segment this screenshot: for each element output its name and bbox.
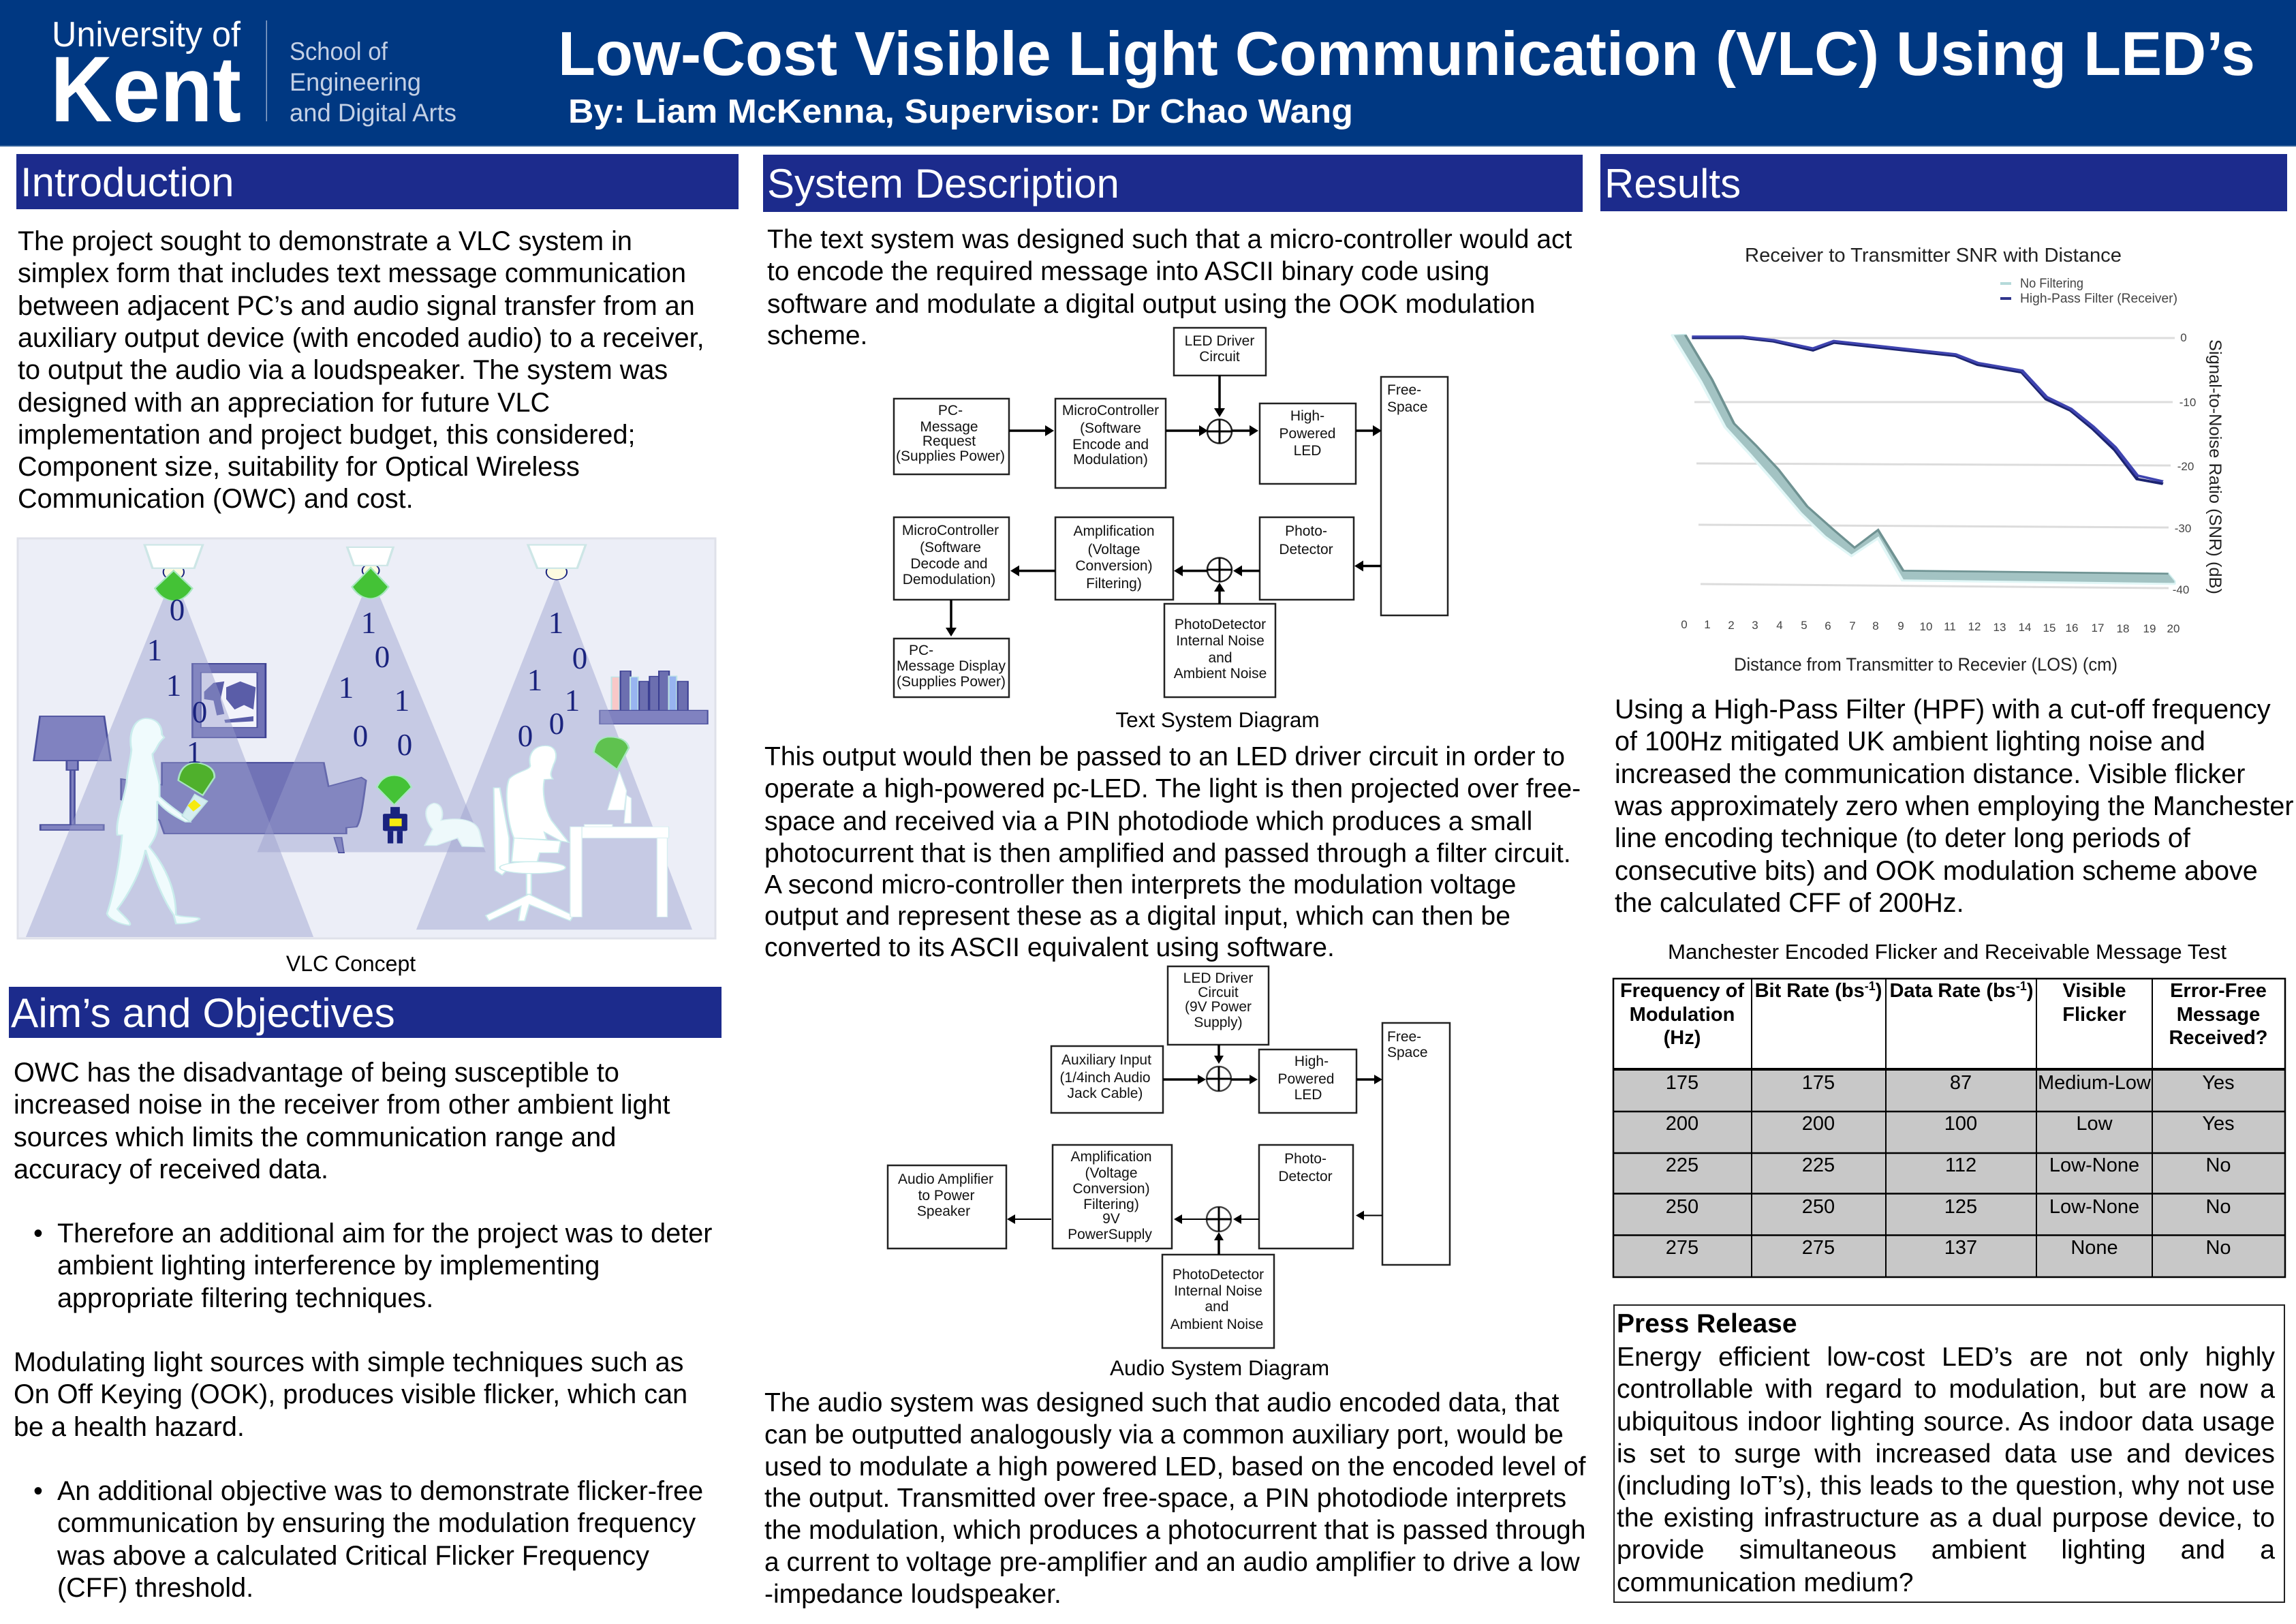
block: PC Message Request: PC- [938,403,963,418]
heading: Aim's and Objectives [9,987,722,1038]
block: High-Powered LED audio: Powered [1278,1071,1334,1087]
binary digits: 1 [548,606,563,640]
text: system description part 2: This output would then be passed to an LED driver circuit in order to [764,742,1565,771]
text: aims body: appropriate filtering techniques. [57,1283,433,1313]
binary digits: 0 [397,728,412,762]
x tick labels: 8 [1872,619,1879,632]
text: results body: increased the communication distance. Visible flicker [1615,759,2245,789]
x tick labels: 10 [1920,620,1932,633]
x tick labels: 2 [1728,619,1735,632]
binary digits: 0 [572,641,587,675]
table rows: Medium-Low [2038,1072,2152,1094]
binary digits: 1 [527,663,542,697]
text: aims body [14,1058,712,1603]
text: introduction body: Communication (OWC) and cost. [18,484,414,514]
x tick labels: 18 [2117,622,2129,635]
table rows: 87 [1950,1072,1972,1094]
block: PhotoDetector noise audio: Ambient Noise [1170,1317,1263,1332]
summing junctions [1207,1067,1231,1231]
binary digits: 0 [549,707,564,741]
text: results body: was approximately zero when employing the Manchester [1614,791,2294,821]
caption: VLC Concept: VLC Concept [286,951,416,976]
table header: -1 [1865,979,1876,993]
block: Amplification: (Voltage [1087,542,1141,557]
x tick labels: 0 [1681,618,1688,631]
text: introduction body: simplex form that includes text message communication [18,258,686,288]
bookshelf [600,671,708,724]
press release body: the existing infrastructure as a dual purpose device, to [1617,1503,2275,1533]
text: system description part 2 [764,742,1581,962]
block: Auxiliary Input: Auxiliary Input [1061,1052,1151,1068]
table rows: 175 [1666,1072,1698,1094]
text: introduction body: Component size, suitability for Optical Wireless [18,452,580,482]
block: PhotoDetector noise: Internal Noise [1176,633,1265,649]
block: Audio Amplifier: Audio Amplifier [898,1171,993,1187]
block: PC Message Request [894,399,1009,474]
binary digits: 1 [187,735,202,769]
heading: Results: Results [1604,161,1741,206]
logo: School of Engineering and Digital Arts: and Digital Arts [290,99,456,127]
heading: Introduction [16,154,739,209]
chart title: Receiver to Transmitter SNR with Distance [1745,245,2122,266]
x tick labels: 17 [2092,622,2104,634]
x tick labels: 15 [2043,622,2055,634]
text: aims body: be a health hazard. [14,1412,245,1442]
ceiling lights [144,545,586,580]
x tick labels: 14 [2019,621,2031,634]
block: MicroController decode: Decode and [910,556,988,572]
block: PhotoDetector noise audio [1162,1255,1274,1348]
block: Photo-Detector: Photo- [1285,523,1327,539]
text: introduction body: between adjacent PC’s and audio signal transfer from an [18,291,695,321]
block: MicroController encode: Encode and [1072,437,1149,453]
text: results body: of 100Hz mitigated UK ambient lighting noise and [1615,726,2205,756]
binary digits: 0 [375,640,390,674]
binary digits: 1 [147,633,162,667]
receive signal fans [179,737,629,805]
robot [383,807,407,844]
text: results body [1614,694,2294,918]
block: LED Driver Circuit: Circuit [1199,349,1240,365]
block: Photo-Detector [1260,517,1354,600]
text: system description part 1: scheme. [767,321,867,350]
table rows: 250 [1666,1196,1698,1218]
x axis title: Distance from Transmitter to Recevier (LOS) (cm) [1734,654,2117,675]
chart: SNR with distance [1672,245,2224,675]
table rows: 100 [1944,1113,1977,1135]
text: system description part 2: output and represent these as a digital input, which can then be [764,902,1510,931]
logo: University of Kent: Kent [50,37,241,142]
table rows: None [2070,1237,2118,1259]
text: aims body: OWC has the disadvantage of being susceptible to [14,1058,619,1088]
block: Auxiliary Input: Jack Cable) [1068,1086,1143,1101]
arrows [1007,1045,1382,1255]
binary digits: 0 [518,719,533,753]
text: system description part 1: software and modulate a digital output using the OOK modulation [767,290,1535,319]
block: Photo-Detector audio [1259,1145,1353,1248]
header banner [0,0,2296,147]
table rows: 200 [1802,1113,1835,1135]
block: Amplification audio: 9V [1102,1211,1120,1227]
series: no filtering [1672,334,2175,584]
block: PhotoDetector noise audio: Internal Noise [1174,1283,1262,1299]
logo: School of Engineering and Digital Arts: School of [290,37,388,65]
block: Auxiliary Input: (1/4inch Audio [1059,1070,1151,1086]
x tick labels: 12 [1968,620,1981,633]
y tick labels: -10 [2179,396,2196,409]
block: Photo-Detector: Detector [1279,542,1333,557]
text: system description part 3: the output. Transmitted over free-space, a PIN photodiode interprets [764,1484,1566,1513]
block: Amplification [1055,517,1173,600]
illustration: VLC concept [18,538,715,938]
press release body: provide simultaneous ambient lighting and a [1617,1535,2275,1565]
text: aims body: Therefore an additional aim for the project was to deter [57,1219,712,1248]
block: LED Driver Circuit: LED Driver [1185,333,1254,349]
block: Amplification audio: PowerSupply [1068,1227,1152,1242]
text: aims body: On Off Keying (OOK), produces visible flicker, which can [14,1379,687,1409]
block: PhotoDetector noise: Ambient Noise [1174,666,1267,681]
press release body: ubiquitous indoor lighting source. As indoor data usage [1617,1407,2275,1437]
table header: Data Rate (bs [1889,980,2016,1002]
summing junctions [1207,420,1232,582]
binary digits: 1 [166,669,181,703]
table rows: Low-None [2049,1196,2139,1218]
heading: System Description [763,155,1583,212]
block: Free-Space audio: Free- [1387,1029,1421,1045]
text: aims body: increased noise in the receiver from other ambient light [14,1090,670,1120]
logo: University of Kent: University of [52,15,241,55]
block: Audio Amplifier: Speaker [917,1204,970,1219]
table rows: No [2205,1154,2231,1176]
block: LED Driver 9V: (9V Power [1185,999,1252,1015]
y tick labels: -30 [2175,522,2191,535]
diagram: text system [894,328,1448,697]
y tick labels: 0 [2180,331,2187,344]
block: Amplification audio: Filtering) [1083,1197,1139,1212]
caption: Audio System Diagram: Audio System Diagram [1110,1355,1329,1380]
block: Audio Amplifier [888,1165,1006,1248]
block: Amplification audio: Amplification [1070,1149,1152,1165]
x tick labels: 11 [1944,620,1956,633]
block: Amplification: Filtering) [1086,576,1142,592]
text: aims body: accuracy of received data. [14,1154,328,1184]
text: results body: the calculated CFF of 200Hz. [1615,888,1964,918]
text: aims body: An additional objective was to demonstrate flicker-free [57,1476,703,1506]
block: Photo-Detector audio: Detector [1278,1169,1333,1184]
tablet [182,795,207,822]
block: PhotoDetector noise: PhotoDetector [1175,617,1266,632]
block: LED Driver Circuit [1174,328,1266,376]
block: MicroController decode: MicroController [902,523,999,538]
x tick labels: 7 [1849,619,1856,632]
text: system description part 3: a current to voltage pre-amplifier and an audio amplifier to drive a low [764,1548,1580,1577]
table header: Visible [2063,980,2126,1002]
block: High-Powered LED audio: LED [1294,1087,1322,1103]
x tick labels: 1 [1704,618,1711,631]
text: aims body: • [33,1219,43,1248]
table rows: Low [2076,1113,2113,1135]
block: Amplification audio [1053,1145,1172,1248]
press release body [1617,1343,2276,1597]
text: results body: Using a High-Pass Filter (HPF) with a cut-off frequency [1615,694,2271,724]
x tick labels: 4 [1776,619,1783,632]
block: Auxiliary Input [1051,1046,1163,1113]
heading: Introduction: Introduction [20,159,234,205]
block: High-Powered LED: Powered [1279,426,1335,442]
press release body: communication medium? [1617,1568,1914,1597]
heading: Results [1600,154,2287,211]
text: system description part 3 [764,1388,1586,1609]
table header: -1 [2016,979,2027,993]
table title: Manchester Encoded Flicker and Receivable Message Test [1668,940,2227,964]
block: MicroController encode: MicroController [1062,403,1159,418]
block: Amplification: Amplification [1073,523,1155,539]
y tick labels [2173,331,2196,596]
table header: Bit Rate (bs [1755,980,1865,1002]
legend [2000,277,2177,306]
text: introduction body: designed with an appreciation for future VLC [18,388,550,418]
block: Photo-Detector audio: Photo- [1284,1151,1327,1167]
y tick labels: -40 [2173,583,2189,596]
block: PC Message Display: (Supplies Power) [897,674,1006,690]
text: introduction body: auxiliary output device (with encoded audio) to a receiver, [18,323,704,353]
caption: Text System Diagram: Text System Diagram [1115,707,1320,732]
table rows: Yes [2202,1072,2235,1094]
text: introduction body: The project sought to demonstrate a VLC system in [18,226,632,256]
text: aims body: ambient lighting interference by implementing [57,1251,600,1281]
x tick labels: 3 [1752,619,1758,632]
binary digits [147,593,587,769]
x tick labels [1681,618,2179,635]
text: system description part 1: The text system was designed such that a micro-controller would act [767,225,1572,254]
x tick labels: 5 [1801,619,1808,632]
block: PC Message Display: PC- [909,643,933,658]
block: PhotoDetector noise audio: PhotoDetector [1173,1267,1264,1283]
press release heading: Press Release [1617,1309,1797,1338]
press release body: controllable with regard to modulation, but are now a [1617,1375,2275,1404]
block: MicroController decode [894,517,1009,600]
floor lamp [34,716,111,830]
text: aims body: Modulating light sources with simple techniques such as [14,1347,683,1377]
table rows: 275 [1666,1237,1698,1259]
text: introduction body: to output the audio via a loudspeaker. The system was [18,355,668,385]
table header: Frequency of [1620,980,1744,1002]
text: system description part 3: used to modulate a high powered LED, based on the encoded level of [764,1452,1586,1482]
framed world map [192,664,266,737]
table header: (Hz) [1664,1027,1701,1049]
table rows: 175 [1802,1072,1835,1094]
block: LED Driver 9V: LED Driver [1183,970,1253,986]
press release body: Energy efficient low-cost LED’s are not only highly [1617,1343,2275,1372]
binary digits: 1 [361,606,376,640]
block: High-Powered LED: High- [1290,408,1324,424]
table header: Flicker [2062,1004,2126,1026]
text: system description part 3: -impedance loudspeaker. [764,1580,1061,1609]
block: Free-Space: Space [1387,399,1428,415]
block: Free-Space [1381,377,1448,615]
press release body: (including IoT’s), this leads to the question, why not use [1617,1471,2275,1501]
block: PC Message Display: Message Display [897,658,1006,674]
block: LED Driver 9V [1168,966,1269,1045]
text: system description part 2: converted to its ASCII equivalent using software. [764,933,1335,962]
block: Amplification audio: (Voltage [1085,1165,1138,1181]
table: flicker test [1613,979,2285,1277]
table rows: 137 [1944,1237,1977,1259]
x tick labels: 20 [2167,622,2179,635]
block: Free-Space audio [1382,1023,1450,1265]
y axis title: Signal-to-Noise Ratio (SNR) (dB) [2205,339,2224,594]
text: aims body: sources which limits the communication range and [14,1122,616,1152]
authors: By: Liam McKenna, Supervisor: Dr Chao Wang [568,93,1353,130]
block: PhotoDetector noise: and [1208,650,1232,666]
text: aims body: (CFF) threshold. [57,1573,253,1603]
block: Free-Space audio: Space [1387,1045,1428,1060]
baby [424,803,483,847]
table rows: No [2205,1196,2231,1218]
block: LED Driver 9V: Circuit [1198,985,1239,1000]
text: system description part 3: can be outputted analogously via a common auxiliary port, would be [764,1420,1564,1450]
block: LED Driver 9V: Supply) [1194,1015,1243,1030]
light cones [26,574,692,937]
text: system description part 1: to encode the required message into ASCII binary code using [767,257,1489,286]
table rows: 225 [1802,1154,1835,1176]
diagram: audio system [888,966,1450,1348]
x tick labels: 6 [1825,619,1831,632]
block: PhotoDetector noise [1164,604,1275,697]
sofa [121,763,366,853]
grid lines [1694,338,2175,588]
x tick labels: 16 [2066,622,2078,634]
table rows: Low-None [2049,1154,2139,1176]
table header: Message [2177,1004,2260,1026]
block: Audio Amplifier: to Power [918,1188,974,1204]
table header: Modulation [1630,1004,1735,1026]
person walking [107,718,200,925]
binary digits: 0 [353,719,368,753]
desk and monitor [570,771,669,917]
block: MicroController decode: (Software [920,540,981,555]
table rows: 275 [1802,1237,1835,1259]
text: aims body: • [33,1476,43,1506]
table header: Error-Free [2170,980,2267,1002]
block: High-Powered LED: LED [1294,443,1321,459]
table header: ) [1876,980,1882,1002]
binary digits: 0 [170,593,185,627]
press release body: is set to surge with increased data use and devices [1617,1439,2275,1469]
text: system description part 2: operate a high-powered pc-LED. The light is then projected over free- [764,774,1581,803]
y tick labels: -20 [2177,460,2194,473]
text: aims body: communication by ensuring the modulation frequency [57,1508,696,1538]
block: Amplification: Conversion) [1075,558,1153,574]
table rows: 225 [1666,1154,1698,1176]
text: introduction body [18,226,704,514]
transmit signal fans [155,568,388,601]
binary digits: 1 [565,684,580,718]
text: system description part 1 [767,225,1572,350]
text: aims body: was above a calculated Critical Flicker Frequency [57,1541,649,1571]
text: system description part 3: the modulation, which produces a photocurrent that is passed through [764,1516,1585,1545]
binary digits: 1 [339,671,354,705]
block: High-Powered LED audio: High- [1294,1054,1329,1069]
table rows: 125 [1944,1196,1977,1218]
text: system description part 2: photocurrent that is then amplified and passed through a filter circuit. [764,839,1571,868]
table header [1620,979,2268,1049]
block: Free-Space: Free- [1387,382,1421,398]
block: PC Message Request: (Supplies Power) [896,448,1005,464]
text: system description part 2: space and received via a PIN photodiode which produces a small [764,807,1532,836]
text: results body: consecutive bits) and OOK modulation scheme above [1615,856,2258,886]
binary digits: 0 [192,695,207,729]
table rows: 200 [1666,1113,1698,1135]
block: PC Message Request: Request [922,433,976,449]
block: PC Message Display [894,639,1009,697]
logo: School of Engineering and Digital Arts: Engineering [290,68,421,96]
block: High-Powered LED audio [1259,1050,1356,1113]
text: system description part 2: A second micro-controller then interprets the modulation voltage [764,870,1516,900]
table rows: 112 [1945,1154,1976,1176]
table rows: 250 [1802,1196,1835,1218]
panel: press release [1613,1304,2285,1603]
block: High-Powered LED [1260,403,1356,484]
block: PhotoDetector noise audio: and [1205,1299,1229,1315]
x tick labels: 13 [1994,621,2006,634]
table rows: No [2205,1237,2231,1259]
person at desk [486,746,574,921]
block: MicroController encode: (Software [1080,420,1141,436]
heading: System Description: System Description [767,161,1119,206]
text: introduction body: implementation and project budget, this considered; [18,420,635,450]
block: MicroController encode [1055,399,1166,488]
heading: Aim's and Objectives: Aim’s and Objectives [11,990,395,1036]
x tick labels: 9 [1897,619,1904,632]
text: results body: line encoding technique (to deter long periods of [1615,823,2191,853]
logo: School of Engineering and Digital Arts [266,20,456,127]
table header: ) [2027,980,2034,1002]
block: MicroController decode: Demodulation) [903,572,995,587]
table header: Received? [2169,1027,2268,1049]
table rows [1666,1072,2235,1259]
legend: No Filtering [2020,277,2083,291]
block: MicroController encode: Modulation) [1073,452,1148,468]
x tick labels: 19 [2143,622,2156,635]
binary digits: 1 [394,684,409,718]
series: high-pass filter [1692,337,2163,484]
block: PC Message Request: Message [920,419,978,435]
legend: High-Pass Filter (Receiver) [2020,292,2177,306]
text: system description part 3: The audio system was designed such that audio encoded data, that [764,1388,1560,1418]
block: Amplification audio: Conversion) [1072,1181,1150,1197]
title: Low-Cost Visible Light Communication (VLC) Using LED’s [558,20,2255,89]
table rows: Yes [2202,1113,2235,1135]
arrows [946,376,1382,637]
